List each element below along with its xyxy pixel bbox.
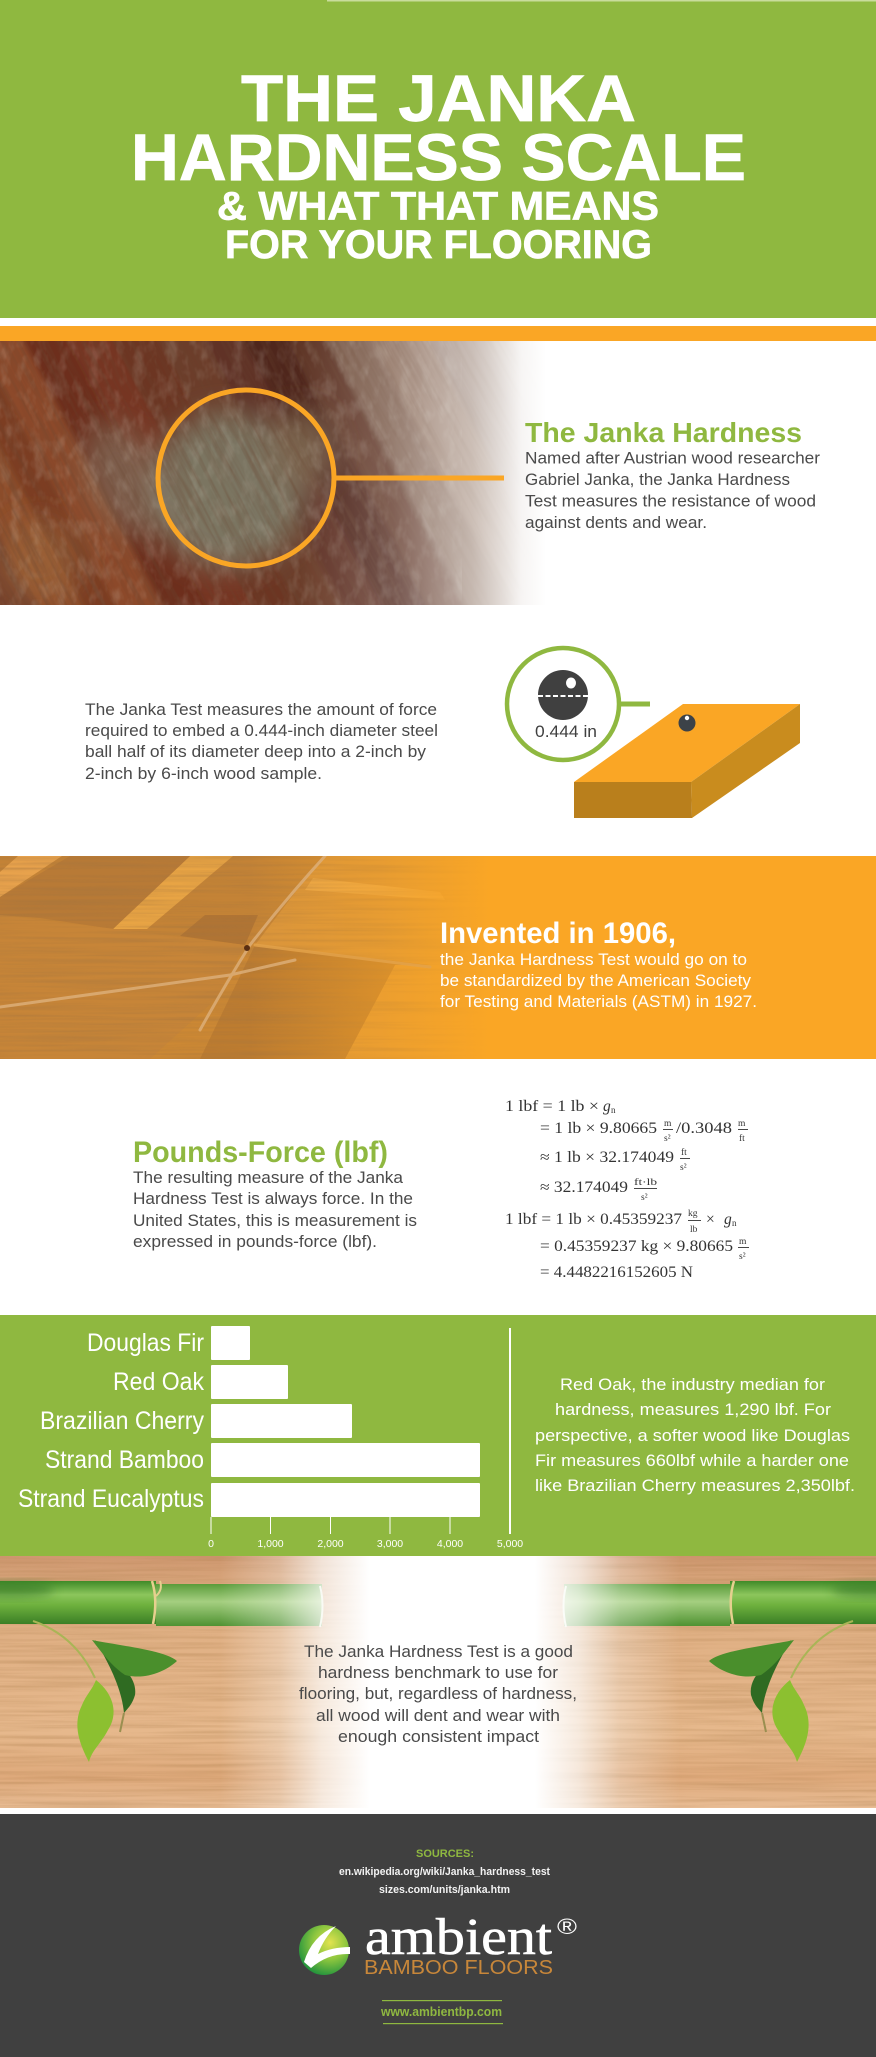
body text: named after: against dents and wear. <box>525 514 707 532</box>
formula: pound-force conversion: × <box>706 1211 715 1228</box>
formula: pound-force conversion: n <box>611 1105 616 1115</box>
bar labels <box>18 1329 204 1513</box>
axis labels <box>208 1538 523 1550</box>
bamboo and leaves right <box>564 1581 876 1762</box>
axis labels: 5,000 <box>497 1538 523 1550</box>
body text: standardized: the Janka Hardness Test would go on to <box>440 951 747 969</box>
axis ticks <box>211 1328 510 1534</box>
body text: conclusion: all wood will dent and wear with <box>316 1706 560 1725</box>
body text: red oak comparison: Fir measures 660lbf while a harder one <box>535 1451 849 1470</box>
body text: test description: ball half of its diameter deep into a 2-inch by <box>85 743 427 761</box>
heading: pounds-force: Pounds-Force (lbf) <box>133 1136 388 1169</box>
body text: standardized <box>440 951 757 1011</box>
body text: pounds-force: expressed in pounds-force (lbf). <box>133 1233 377 1251</box>
formula: pound-force conversion <box>505 1098 749 1281</box>
body text: test description: required to embed a 0.444-inch diameter steel <box>85 722 438 740</box>
body text: red oak comparison: hardness, measures 1,290 lbf. For <box>555 1400 831 1419</box>
sources <box>339 1848 550 1896</box>
bar chart <box>18 1326 523 1550</box>
website link <box>380 2000 503 2024</box>
formula: pound-force conversion: g <box>603 1098 611 1115</box>
body text: pounds-force: United States, this is measurement is <box>133 1212 417 1230</box>
formula: pound-force conversion: s² <box>664 1134 671 1144</box>
formula: pound-force conversion: = 1 lb × 9.80665 <box>540 1120 657 1137</box>
body text: red oak comparison: like Brazilian Cherry measures 2,350lbf. <box>535 1476 855 1495</box>
bar labels: Brazilian Cherry <box>40 1407 204 1435</box>
sources: sizes.com/units/janka.htm <box>379 1884 510 1896</box>
scratches on floor <box>0 856 430 1030</box>
formula: pound-force conversion: /0.3048 <box>676 1120 732 1137</box>
formula: pound-force conversion: g <box>724 1211 732 1228</box>
formula: pound-force conversion: s² <box>641 1193 648 1203</box>
formula: pound-force conversion: lb <box>690 1225 698 1235</box>
heading: the Janka hardness: The Janka Hardness <box>525 417 802 448</box>
body text: pounds-force: The resulting measure of the Janka <box>133 1169 404 1187</box>
body text: conclusion: flooring, but, regardless of hardness, <box>299 1684 577 1703</box>
panel: test description <box>85 648 800 818</box>
formula: pound-force conversion: ft <box>681 1147 687 1158</box>
formula: pound-force conversion: n <box>732 1218 737 1228</box>
highlight circle and connector line <box>158 390 504 566</box>
bars <box>211 1326 480 1517</box>
body text: conclusion <box>299 1642 577 1746</box>
formula: pound-force conversion: m <box>738 1119 746 1129</box>
photo: wood background <box>0 1556 876 1808</box>
panel: pounds-force <box>133 1098 749 1281</box>
axis labels: 1,000 <box>257 1538 284 1550</box>
title <box>131 61 746 267</box>
formula: pound-force conversion: s² <box>739 1252 746 1262</box>
body text: test description: 2-inch by 6-inch wood sample. <box>85 765 322 783</box>
panel: invented in 1906 <box>0 856 876 1059</box>
formula: pound-force conversion: m <box>664 1119 672 1129</box>
body text: test description: The Janka Test measures the amount of force <box>85 701 437 719</box>
title: HARDNESS SCALE <box>131 120 746 194</box>
body text: pounds-force <box>133 1169 417 1251</box>
body text: named after: Gabriel Janka, the Janka Hardness <box>525 471 790 489</box>
body text: conclusion: The Janka Hardness Test is a good <box>304 1642 573 1661</box>
logo: ambient bamboo floors: ambient <box>365 1909 553 1966</box>
icon: steel ball magnifier <box>507 648 650 760</box>
worn grey patches <box>0 410 334 600</box>
photo: worn dark wood floor <box>0 341 530 605</box>
orange divider band <box>0 326 876 341</box>
body text: red oak comparison: perspective, a softer wood like Douglas <box>535 1426 850 1445</box>
title: FOR YOUR FLOORING <box>225 223 652 267</box>
panel: footer <box>0 1814 876 2057</box>
body text: standardized: be standardized by the American Society <box>440 972 752 990</box>
bar labels: Douglas Fir <box>87 1329 204 1357</box>
axis labels: 0 <box>208 1538 214 1550</box>
body text: red oak comparison <box>535 1375 855 1495</box>
website link: www.ambientbp.com <box>380 2005 502 2019</box>
formula: pound-force conversion: = 4.4482216152605 N <box>540 1264 693 1281</box>
body text: named after: Named after Austrian wood researcher <box>525 450 821 468</box>
sources: en.wikipedia.org/wiki/Janka_hardness_test <box>339 1866 550 1878</box>
formula: pound-force conversion: s² <box>680 1163 687 1173</box>
icon: wood sample block <box>574 704 800 818</box>
sources: SOURCES: <box>416 1848 474 1860</box>
body text: named after <box>525 450 821 532</box>
body text: pounds-force: Hardness Test is always force. In the <box>133 1190 413 1208</box>
body text: red oak comparison: Red Oak, the industry median for <box>560 1375 825 1394</box>
body text: standardized: for Testing and Materials (ASTM) in 1927. <box>440 993 757 1011</box>
formula: pound-force conversion: ≈ 32.174049 <box>540 1179 628 1196</box>
formula: pound-force conversion: 1 lbf = 1 lb × <box>505 1098 599 1115</box>
formula: pound-force conversion: m <box>739 1237 747 1247</box>
icon: steel ball magnifier: 0.444 in <box>535 723 597 741</box>
panel: bamboo and wood conclusion <box>0 1556 876 1808</box>
photo: scratched parquet floor <box>0 856 500 1059</box>
panel: hardness comparison <box>0 1315 876 1556</box>
formula: pound-force conversion: kg <box>688 1209 698 1219</box>
bar labels: Strand Eucalyptus <box>18 1485 204 1513</box>
panel: the Janka hardness <box>0 341 820 605</box>
formula: pound-force conversion: = 0.45359237 kg × 9.80665 <box>540 1238 733 1255</box>
body text: named after: Test measures the resistance of wood <box>525 492 816 510</box>
logo: ambient bamboo floors: ® <box>557 1914 577 1939</box>
formula: pound-force conversion: ft·lb <box>634 1177 657 1188</box>
body text: test description <box>85 701 438 783</box>
bamboo and leaves left <box>0 1581 322 1762</box>
formula: pound-force conversion: ft <box>739 1133 745 1144</box>
bar labels: Red Oak <box>113 1368 204 1396</box>
formula: pound-force conversion: ≈ 1 lb × 32.174049 <box>540 1149 674 1166</box>
title: THE JANKA <box>241 61 636 135</box>
bar labels: Strand Bamboo <box>45 1446 204 1474</box>
formula: pound-force conversion: 1 lbf = 1 lb × 0.45359237 <box>505 1211 682 1228</box>
panel: title header <box>0 0 876 318</box>
logo: ambient bamboo floors <box>299 1909 577 1979</box>
axis labels: 2,000 <box>317 1538 344 1550</box>
body text: conclusion: enough consistent impact <box>338 1727 539 1746</box>
title: & WHAT THAT MEANS <box>217 184 659 228</box>
body text: conclusion: hardness benchmark to use for <box>318 1663 558 1682</box>
axis labels: 3,000 <box>377 1538 403 1550</box>
heading: invented in 1906: Invented in 1906, <box>440 917 676 950</box>
axis labels: 4,000 <box>437 1538 463 1550</box>
logo: ambient bamboo floors: BAMBOO FLOORS <box>364 1957 553 1979</box>
